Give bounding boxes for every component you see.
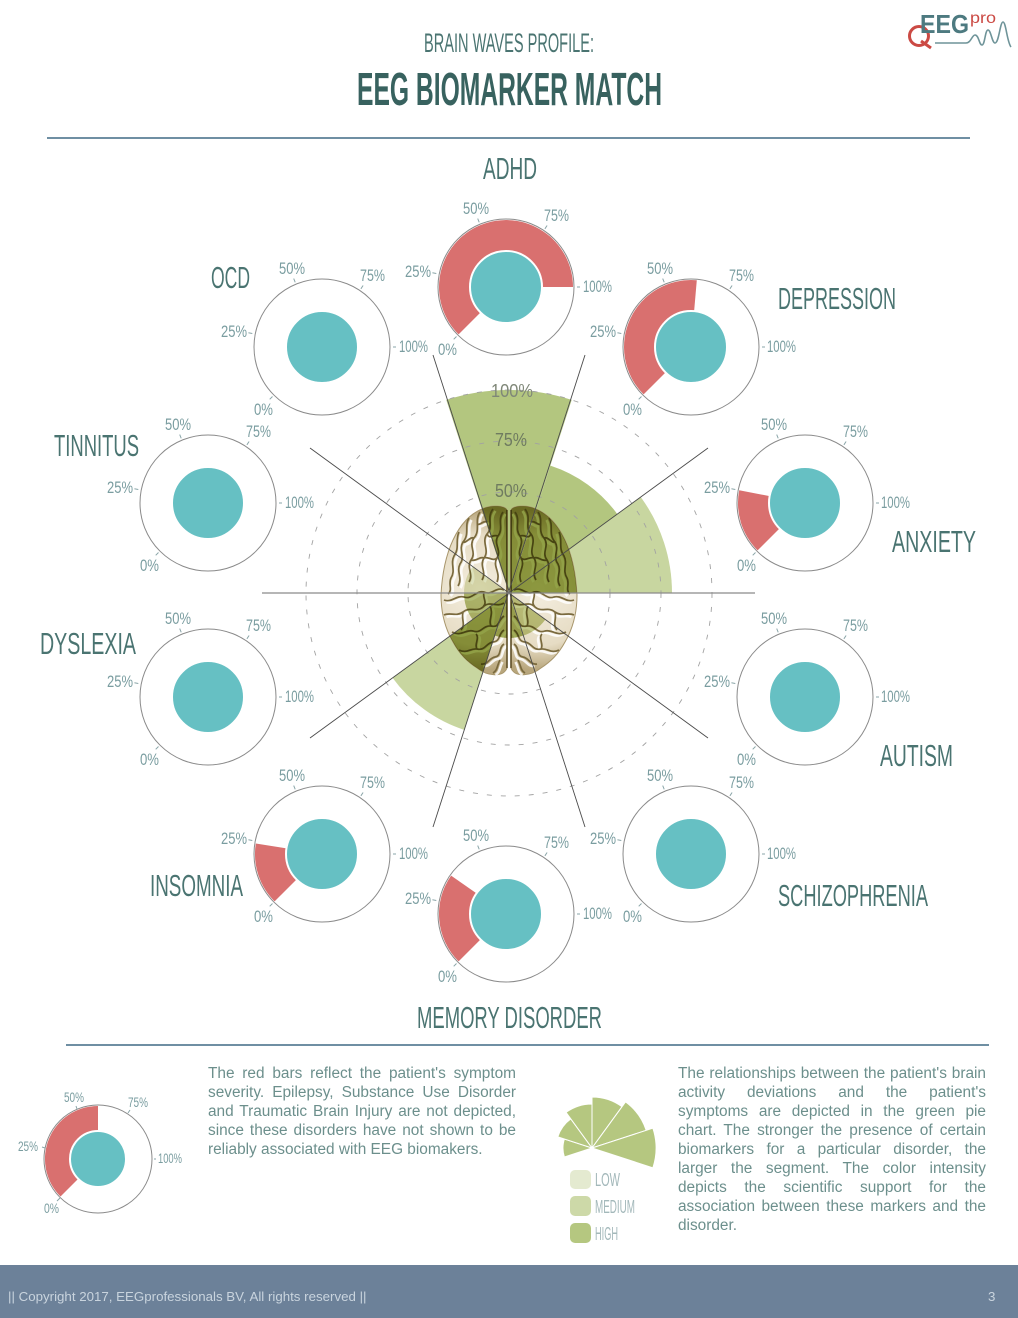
text block: red bars explanation: The red bars reflect the patient's symptom <box>208 1065 516 1082</box>
legend gauge: 25% <box>18 1138 38 1154</box>
gauge: Anxiety: 0% <box>737 556 756 575</box>
legend: high <box>570 1223 618 1244</box>
legend gauge: 100% <box>158 1150 182 1166</box>
disorder label: Memory disorder: MEMORY DISORDER <box>417 1000 602 1035</box>
legend gauge: 50% <box>64 1089 84 1105</box>
text block: green pie explanation: The relationships between the patient's brain <box>678 1065 986 1082</box>
legend gauge: 75% <box>128 1094 148 1110</box>
gauge: OCD: 0% <box>254 400 273 419</box>
gauge: Autism: 50% <box>761 609 787 628</box>
disorder label: Tinnitus: TINNITUS <box>54 428 139 463</box>
gauge: Dyslexia: 25% <box>107 672 133 691</box>
scale rings <box>306 390 712 796</box>
logo: qEEGpro: EEG <box>920 9 969 39</box>
gauge: Dyslexia: 75% <box>246 616 271 635</box>
footer bar: 3 <box>988 1289 995 1304</box>
gauge: Depression: 0% <box>623 400 642 419</box>
gauge: Insomnia: 100% <box>399 844 428 863</box>
logo: qEEGpro: pro <box>970 10 996 27</box>
sector: ADHD <box>446 390 572 593</box>
gauge: Memory disorder: 0% <box>438 967 457 986</box>
text block: green pie explanation: symptoms are depicted in the green pie <box>678 1103 986 1120</box>
gauge: Depression: 50% <box>647 259 673 278</box>
gauge: Anxiety: 100% <box>881 493 910 512</box>
gauge: Tinnitus: 100% <box>285 493 314 512</box>
brain illustration <box>440 506 578 676</box>
gauge: ADHD: 100% <box>583 277 612 296</box>
disorder label: Depression: DEPRESSION <box>778 281 896 316</box>
title: main: EEG BIOMARKER MATCH <box>357 63 662 115</box>
gauge: Autism: 25% <box>704 672 730 691</box>
footer bar <box>0 1265 1018 1318</box>
sector: Anxiety <box>509 497 672 593</box>
gauge: ADHD: 75% <box>544 206 569 225</box>
gauge: ADHD: 0% <box>438 340 457 359</box>
legend: medium <box>570 1196 635 1217</box>
gauge: Anxiety: 25% <box>704 478 730 497</box>
gauge: Anxiety: 75% <box>843 422 868 441</box>
gauge: OCD: 75% <box>360 266 385 285</box>
gauge: Insomnia: 0% <box>254 907 273 926</box>
gauge: ADHD <box>405 199 612 359</box>
gauge: Autism: 100% <box>881 687 910 706</box>
gauge: Memory disorder <box>405 826 612 986</box>
disorder label: Autism: AUTISM <box>880 738 953 773</box>
spokes <box>262 355 755 827</box>
gauge: Tinnitus: 75% <box>246 422 271 441</box>
scale labels: 100% <box>491 381 533 401</box>
gauge: Dyslexia <box>107 609 314 769</box>
gauge: Tinnitus: 0% <box>140 556 159 575</box>
text block: red bars explanation: severity. Epilepsy, Substance Use Disorder <box>208 1084 516 1101</box>
disorder label: Dyslexia: DYSLEXIA <box>40 626 136 661</box>
gauge: Autism <box>704 609 910 769</box>
gauge: Tinnitus <box>107 415 314 575</box>
gauge: Dyslexia: 0% <box>140 750 159 769</box>
gauge: Schizophrenia <box>590 766 796 926</box>
legend: low <box>570 1170 620 1190</box>
gauge: Memory disorder: 50% <box>463 826 489 845</box>
gauge: Insomnia: 75% <box>360 773 385 792</box>
gauge: OCD: 25% <box>221 322 247 341</box>
legend gauge: 0% <box>44 1200 59 1216</box>
scale labels: 50% <box>495 481 527 501</box>
legend gauge <box>18 1089 182 1216</box>
text block: red bars explanation: and Traumatic Brain Injury are not depicted, <box>208 1103 516 1120</box>
gauge: Schizophrenia: 0% <box>623 907 642 926</box>
text block: green pie explanation: biomarkers for a particular disorder, the <box>678 1141 986 1158</box>
text block: red bars explanation: since these disorders have not shown to be <box>208 1122 516 1139</box>
footer bar: || Copyright 2017, EEGprofessionals BV, All rights reserved || <box>8 1289 366 1304</box>
gauge: Memory disorder: 25% <box>405 889 431 908</box>
legend: high: HIGH <box>595 1224 618 1244</box>
disorder label: ADHD: ADHD <box>483 151 537 186</box>
gauge: Depression <box>590 259 796 419</box>
gauge: Memory disorder: 75% <box>544 833 569 852</box>
gauge: Tinnitus: 50% <box>165 415 191 434</box>
gauge: Depression: 75% <box>729 266 754 285</box>
gauge: Insomnia <box>221 766 428 926</box>
sector: Insomnia <box>392 593 509 730</box>
gauge: Anxiety: 50% <box>761 415 787 434</box>
text block: red bars explanation: reliably associated with EEG biomakers. <box>208 1141 483 1158</box>
gauge: Insomnia: 25% <box>221 829 247 848</box>
text block: green pie explanation: larger the segment. The color intensity <box>678 1160 986 1177</box>
logo: qEEGpro <box>910 9 1011 48</box>
disorder label: Insomnia: INSOMNIA <box>150 868 243 903</box>
gauge: OCD: 100% <box>399 337 428 356</box>
text block: green pie explanation: depicts the scientific support for the <box>678 1179 986 1196</box>
gauge: Memory disorder: 100% <box>583 904 612 923</box>
text block: red bars explanation <box>208 1065 516 1158</box>
gauge: Schizophrenia: 75% <box>729 773 754 792</box>
gauge: Anxiety <box>704 415 910 575</box>
gauge: OCD <box>221 259 428 419</box>
gauge: Depression: 100% <box>767 337 796 356</box>
text block: green pie explanation: association between these markers and the <box>678 1198 986 1215</box>
scale labels <box>491 381 533 501</box>
sector: Depression <box>509 466 617 593</box>
gauge: ADHD: 50% <box>463 199 489 218</box>
text block: green pie explanation: activity deviations and the patient's <box>678 1084 986 1101</box>
gauge: Tinnitus: 25% <box>107 478 133 497</box>
title: subtitle: BRAIN WAVES PROFILE: <box>424 28 594 58</box>
text block: green pie explanation <box>678 1065 986 1234</box>
gauge: Autism: 0% <box>737 750 756 769</box>
legend: medium: MEDIUM <box>595 1197 635 1217</box>
gauge: Depression: 25% <box>590 322 616 341</box>
gauge: ADHD: 25% <box>405 262 431 281</box>
gauge: Dyslexia: 50% <box>165 609 191 628</box>
gauge: OCD: 50% <box>279 259 305 278</box>
legend: low: LOW <box>595 1170 620 1190</box>
gauge: Schizophrenia: 25% <box>590 829 616 848</box>
gauge: Schizophrenia: 100% <box>767 844 796 863</box>
gauge: Dyslexia: 100% <box>285 687 314 706</box>
polar chart <box>262 355 755 827</box>
gauge: Autism: 75% <box>843 616 868 635</box>
disorder label: OCD: OCD <box>211 260 250 295</box>
text block: green pie explanation: chart. The stronger the presence of certain <box>678 1122 986 1139</box>
legend pie <box>558 1097 656 1168</box>
text block: green pie explanation: disorder. <box>678 1217 737 1234</box>
gauge: Insomnia: 50% <box>279 766 305 785</box>
gauge: Schizophrenia: 50% <box>647 766 673 785</box>
scale labels: 75% <box>495 430 527 450</box>
